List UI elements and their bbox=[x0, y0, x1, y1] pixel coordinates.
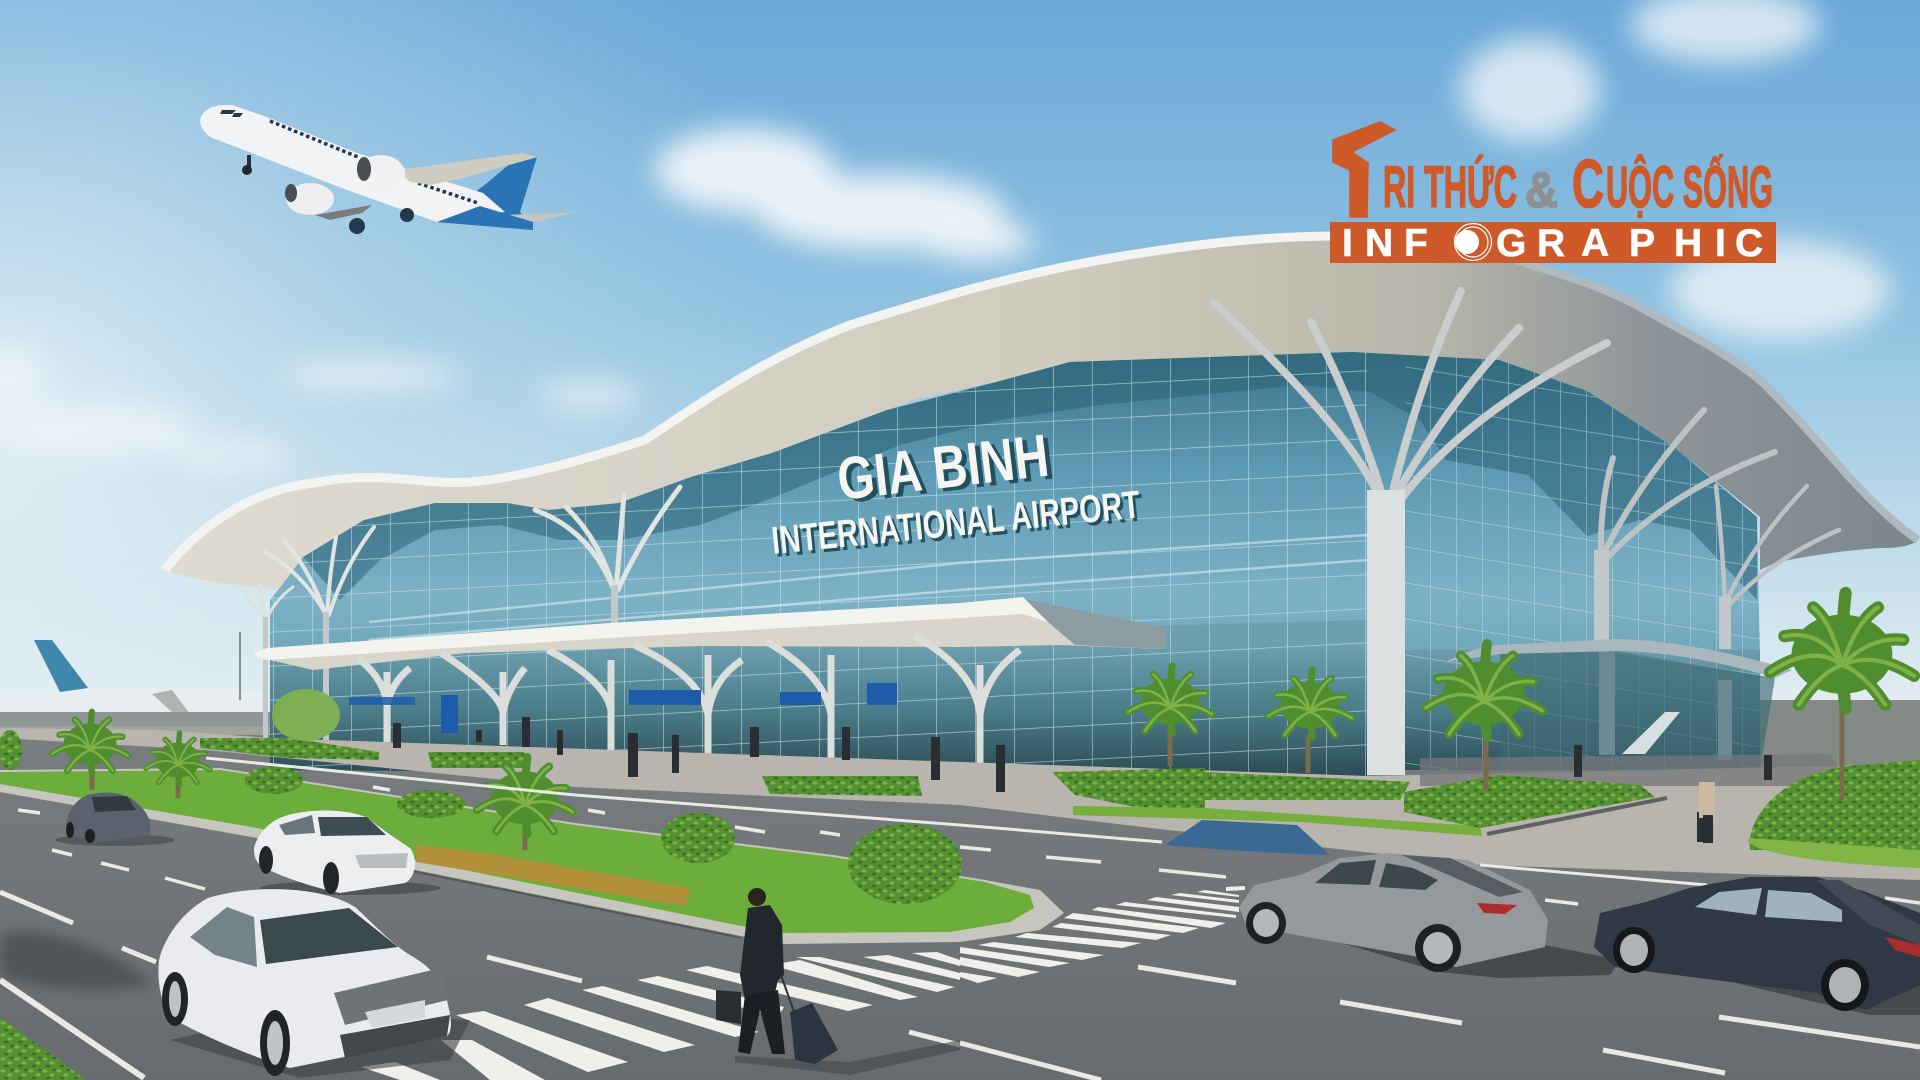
main column bbox=[1367, 490, 1405, 775]
blue entrance signs bbox=[349, 683, 897, 733]
pedestrians on the plaza bbox=[393, 717, 1772, 843]
logo banner: I bbox=[1342, 222, 1353, 265]
airplane in flight bbox=[200, 105, 575, 234]
side canopy bbox=[1446, 639, 1792, 770]
logo wordmark: C bbox=[1572, 146, 1604, 222]
logo banner: F bbox=[1404, 222, 1428, 265]
crosswalk stripes bbox=[361, 886, 1245, 1080]
logo banner: A bbox=[1581, 222, 1609, 265]
logo wordmark bbox=[1333, 122, 1773, 222]
car: silver sedan bbox=[1239, 853, 1620, 978]
sign: Gia Binh International Airport: GIA BINH bbox=[834, 422, 1052, 513]
logo banner: I bbox=[1715, 222, 1726, 265]
logo banner: H bbox=[1674, 222, 1702, 265]
logo banner: R bbox=[1537, 222, 1565, 265]
car: dark navy sedan bbox=[1594, 877, 1920, 1015]
road markings bbox=[0, 758, 1920, 1080]
distant airport apron and parked aircraft bbox=[0, 632, 270, 752]
car: white sedan mid bbox=[254, 811, 440, 895]
logo banner: P bbox=[1629, 222, 1655, 265]
landscaping beds near terminal bbox=[0, 738, 1920, 1080]
secondary columns bbox=[263, 550, 1732, 760]
logo banner bbox=[1330, 222, 1776, 265]
roof white edge bbox=[165, 236, 1918, 570]
car: white sedan foreground bbox=[158, 889, 470, 1078]
central green median bbox=[0, 768, 1064, 944]
logo wordmark: & bbox=[1525, 162, 1558, 218]
logo wordmark: RI THỨC bbox=[1383, 155, 1517, 220]
tree beside terminal bbox=[272, 689, 340, 741]
median shrubs bbox=[0, 730, 962, 904]
glass facade with grid bbox=[270, 352, 1760, 778]
car: dark grey hatch bbox=[55, 792, 175, 846]
white staircase bbox=[1622, 712, 1680, 754]
far scenery right of terminal bbox=[1760, 700, 1920, 770]
clouds bbox=[0, 0, 1890, 470]
sign: Gia Binh International Airport: GIA BINH bbox=[839, 425, 1057, 516]
logo: Tri Thức & Cuộc Sống Infographic bbox=[1330, 122, 1776, 265]
plaza bbox=[0, 728, 1920, 880]
sign: Gia Binh International Airport: INTERNATIONAL AIRPORT bbox=[773, 486, 1145, 566]
palm trees bbox=[52, 593, 1914, 850]
logo banner: C bbox=[1735, 222, 1763, 265]
logo banner: N bbox=[1365, 222, 1393, 265]
roof underside bbox=[165, 236, 1918, 590]
blue tarp bbox=[1165, 820, 1330, 855]
sign: Gia Binh International Airport bbox=[770, 422, 1145, 566]
dark forecourt beyond main column bbox=[1420, 754, 1850, 786]
roads bbox=[0, 735, 1920, 1080]
tree-shaped columns of the upper level bbox=[237, 291, 1839, 620]
sign: Gia Binh International Airport: INTERNATIONAL AIRPORT bbox=[770, 483, 1142, 563]
traveller with suitcase bbox=[716, 888, 960, 1075]
logo wordmark: UỘC SỐNG bbox=[1606, 155, 1773, 220]
front canopy bbox=[254, 597, 1167, 766]
logo banner: G bbox=[1496, 222, 1526, 265]
